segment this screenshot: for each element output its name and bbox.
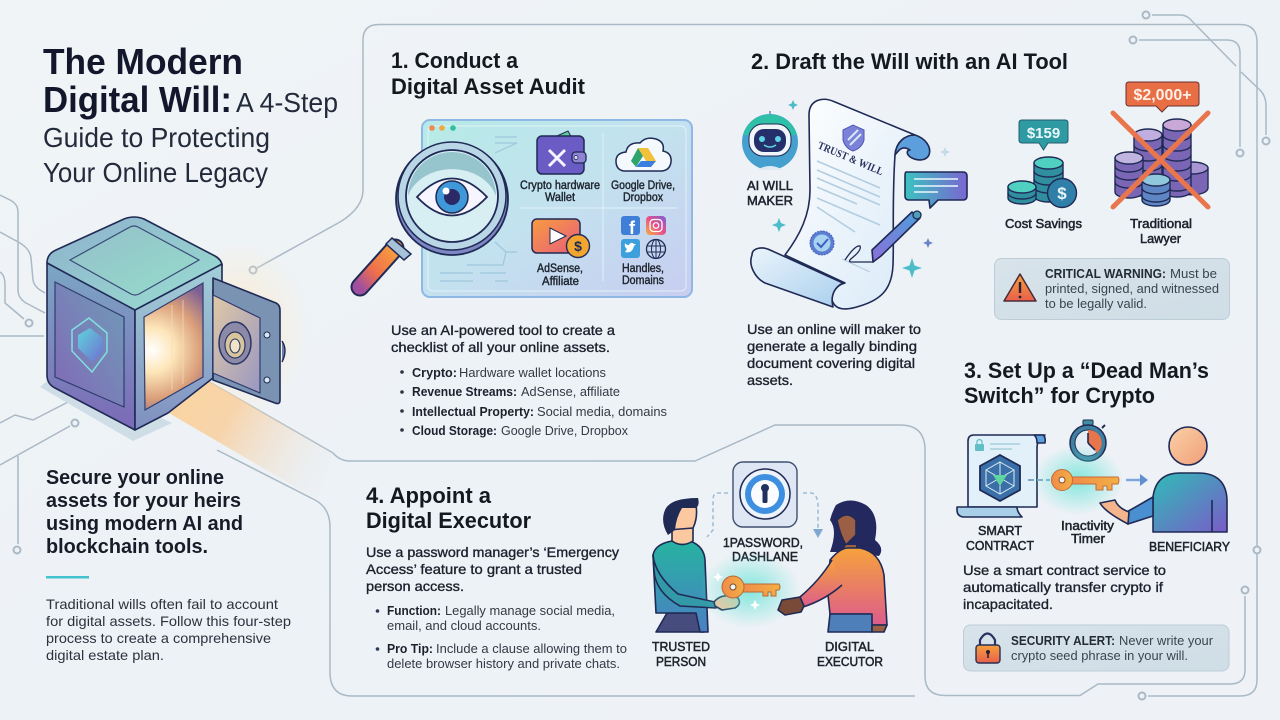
list: step 4 details: Legally manage social media, <box>445 603 615 618</box>
left description: Traditional wills often fail to account <box>46 596 278 612</box>
price badge: $159: $159 <box>1027 125 1060 142</box>
label: traditional lawyer: Traditional <box>1130 217 1192 231</box>
label: cost savings: Cost Savings <box>1005 217 1082 231</box>
labels: step 3 flow: SMART <box>978 524 1022 538</box>
text: step 3 body: Use a smart contract service to <box>963 562 1166 578</box>
label: adsense <box>537 263 583 288</box>
left description: process to create a comprehensive <box>46 630 271 646</box>
arrow <box>1126 474 1148 486</box>
list: step 1 assets: Crypto: <box>412 365 457 380</box>
label: crypto wallet <box>520 180 600 204</box>
labels: step 3 flow: BENEFICIARY <box>1149 540 1231 554</box>
text: step 2 body: Use an online will maker to <box>747 321 921 337</box>
label: cloud storage: Google Drive, <box>611 180 675 192</box>
text: step 2 body: document covering digital <box>747 355 915 371</box>
left intro text: using modern AI and <box>46 513 243 535</box>
heading: step 4: 4. Appoint a <box>366 483 492 508</box>
list: step 1 assets: Social media, domains <box>537 404 667 419</box>
text: step 3 body <box>963 562 1166 612</box>
list: step 4 details: Function: <box>387 603 441 618</box>
icon: cloud drive <box>616 138 671 171</box>
left intro text: blockchain tools. <box>46 536 208 558</box>
label: password managers: DASHLANE <box>732 550 798 564</box>
icon: glowing key <box>1033 445 1123 515</box>
label: handles: Handles, <box>622 263 664 275</box>
list: step 1 assets: Cloud Storage: <box>412 423 497 438</box>
icon: password manager app <box>707 462 823 538</box>
labels: people: DIGITAL <box>825 640 874 654</box>
labels: step 3 flow <box>966 519 1231 554</box>
icon: small coin stacks: $ <box>1057 184 1067 203</box>
icon: magnifying glass with eye <box>360 142 508 287</box>
label: crypto wallet: Wallet <box>545 192 576 204</box>
icon: trusted person <box>653 498 739 632</box>
text: step 1 intro: Use an AI-powered tool to create a <box>391 322 615 338</box>
callout: security alert: crypto seed phrase in your will. <box>1011 649 1188 663</box>
callout: security alert: Never write your <box>1119 634 1213 648</box>
heading: step 4: Digital Executor <box>366 508 531 533</box>
icon: crossed out coin stacks <box>1113 113 1208 207</box>
text: step 2 body <box>747 321 921 388</box>
callout: critical warning <box>994 258 1230 320</box>
text: step 4 intro: Access’ feature to grant a trusted <box>366 561 582 577</box>
list: step 4 details: Include a clause allowing them to <box>436 641 627 656</box>
callout: critical warning: printed, signed, and witnessed <box>1045 282 1219 296</box>
label: handles: Domains <box>622 275 664 287</box>
price badge: $159 <box>1019 120 1068 150</box>
heading: step 3: Switch” for Crypto <box>964 383 1155 408</box>
panel: asset audit window <box>422 120 692 297</box>
label: traditional lawyer <box>1130 217 1192 246</box>
labels: people: PERSON <box>656 655 706 669</box>
list: step 4 details: Pro Tip: <box>387 641 433 656</box>
list: step 4 details <box>376 603 627 671</box>
price badge: $2,000+ <box>1126 82 1199 112</box>
callout: critical warning: to be legally valid. <box>1045 297 1147 311</box>
list: step 4 details: delete browser history and private chats. <box>387 656 620 671</box>
label: handles <box>622 263 664 287</box>
labels: people: EXECUTOR <box>817 655 883 669</box>
text: step 3 body: incapacitated. <box>963 596 1053 612</box>
icon: padlock <box>976 634 1000 663</box>
title: Digital Will: <box>43 79 232 120</box>
text: step 2 body: generate a legally binding <box>747 338 917 354</box>
heading: step 1 <box>391 48 586 99</box>
text: step 1 intro: checklist of all your online assets. <box>391 339 610 355</box>
labels: people: TRUSTED <box>652 640 710 654</box>
callout: critical warning: Must be <box>1170 267 1217 281</box>
icon: beneficiary person <box>1100 427 1227 532</box>
labels: step 3 flow: CONTRACT <box>966 539 1034 553</box>
title: The Modern <box>43 41 243 82</box>
list: step 1 assets: Hardware wallet locations <box>459 365 606 380</box>
icon: glowing key handover <box>700 552 800 628</box>
left description <box>46 596 291 663</box>
price badge: $2,000+: $2,000+ <box>1134 87 1192 104</box>
title: A 4-Step <box>236 87 338 118</box>
label: adsense: AdSense, <box>537 263 583 275</box>
heading: step 1: Digital Asset Audit <box>391 74 586 99</box>
icon: adsense video card: $ <box>574 238 582 254</box>
label: password managers <box>723 536 803 564</box>
heading: step 3 <box>964 358 1209 408</box>
heading: step 1: 1. Conduct a <box>391 48 519 73</box>
text: step 4 intro <box>366 544 619 594</box>
list: step 1 assets: Google Drive, Dropbox <box>501 423 628 438</box>
icon: smart contract <box>957 435 1050 517</box>
icon: adsense video card <box>532 219 590 258</box>
list: step 1 assets: Revenue Streams: <box>412 384 517 399</box>
title <box>43 41 338 188</box>
title: Your Online Legacy <box>43 157 268 188</box>
icon: digital executor person <box>778 500 887 632</box>
text: step 3 body: automatically transfer crypto if <box>963 579 1163 595</box>
label: password managers: 1PASSWORD, <box>723 536 803 550</box>
label: traditional lawyer: Lawyer <box>1140 232 1181 246</box>
text: step 4 intro: person access. <box>366 578 464 594</box>
labels: people <box>652 640 883 669</box>
list: step 1 assets <box>400 365 667 438</box>
text: step 2 body: assets. <box>747 372 793 388</box>
icon: crypto wallet <box>537 131 586 174</box>
heading: step 2: 2. Draft the Will with an AI Tool <box>751 49 1068 74</box>
labels: step 3 flow: Timer <box>1071 532 1105 546</box>
sparkles <box>772 100 950 278</box>
icon: will scroll: TRUST & WILL <box>816 140 885 178</box>
left intro text: Secure your online <box>46 467 224 489</box>
callout: critical warning: CRITICAL WARNING: <box>1045 267 1166 281</box>
labels: step 3 flow: Inactivity <box>1061 519 1115 533</box>
label: AI will maker: AI WILL <box>747 179 793 193</box>
title: Guide to Protecting <box>43 122 270 153</box>
text: step 4 intro: Use a password manager’s ‘Emergency <box>366 544 619 560</box>
icon: social and domain logos: f <box>629 218 636 238</box>
left intro text: assets for your heirs <box>46 490 241 512</box>
icon: AI robot <box>742 111 798 170</box>
left description: digital estate plan. <box>46 647 164 663</box>
label: crypto wallet: Crypto hardware <box>520 180 600 192</box>
callout: security alert <box>964 625 1229 671</box>
list: step 1 assets: AdSense, affiliate <box>521 384 620 399</box>
icon: open safe with light beam <box>40 217 333 500</box>
text: step 1 intro <box>391 322 615 355</box>
icon: warning triangle <box>1004 274 1036 301</box>
heading: step 3: 3. Set Up a “Dead Man’s <box>964 358 1209 383</box>
label: cloud storage <box>611 180 675 204</box>
heading: step 4 <box>366 483 531 533</box>
label: AI will maker <box>747 179 793 208</box>
label: AI will maker: MAKER <box>747 194 793 208</box>
icon: stopwatch <box>1070 420 1106 461</box>
icon: will scroll <box>751 99 967 309</box>
label: cloud storage: Dropbox <box>623 192 663 204</box>
callout: security alert: SECURITY ALERT: <box>1011 634 1115 648</box>
list: step 4 details: email, and cloud accounts. <box>387 618 541 633</box>
list: step 1 assets: Intellectual Property: <box>412 404 534 419</box>
label: adsense: Affiliate <box>542 276 579 288</box>
icon: social and domain logos <box>621 216 666 258</box>
icon: small coin stacks <box>1008 157 1076 208</box>
left description: for digital assets. Follow this four-step <box>46 613 291 629</box>
left intro text <box>46 467 243 558</box>
